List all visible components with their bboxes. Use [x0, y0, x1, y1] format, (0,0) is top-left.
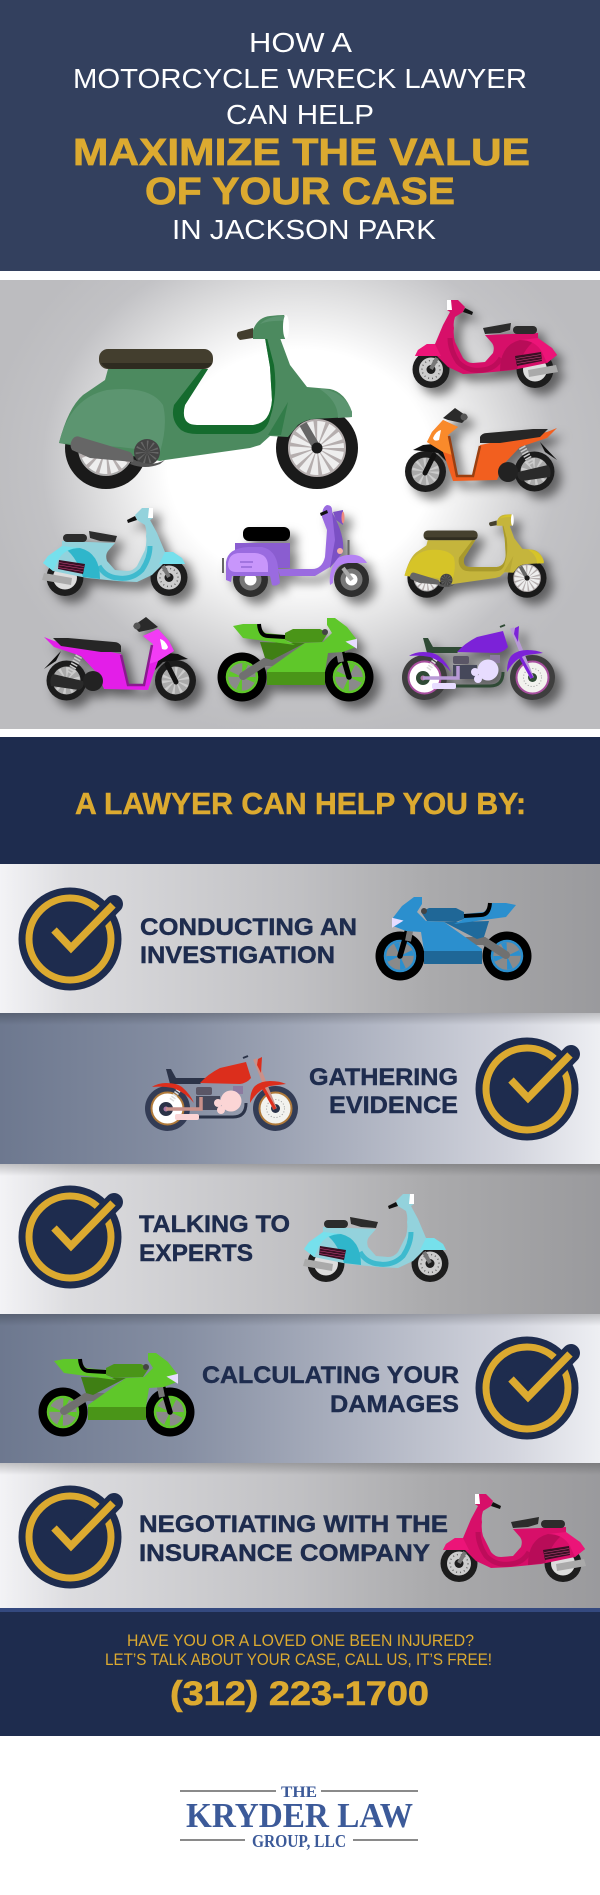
title: MOTORCYCLE WRECK LAWYER [73, 63, 527, 94]
icon: pink scooter [440, 1494, 586, 1582]
icon: violet cruiser [402, 625, 555, 700]
icon: check mark [18, 888, 122, 990]
title: OF YOUR CASE [145, 171, 455, 213]
panel: calculating your damages [0, 1314, 600, 1463]
text: talking to experts: TALKING TO [139, 1211, 290, 1238]
title [73, 27, 530, 245]
panel: lawyer help heading [0, 737, 600, 864]
text: talking to experts: EXPERTS [139, 1240, 253, 1267]
text: negotiating with the insurance company: NEGOTIATING WITH THE [139, 1511, 448, 1538]
text: conducting an investigation [140, 914, 357, 969]
text: gathering evidence [309, 1064, 458, 1119]
icon: check mark [476, 1038, 578, 1140]
icon: green sport bike [218, 618, 374, 702]
header panel [0, 0, 600, 271]
icon: check mark [18, 1186, 122, 1288]
icon: large green scooter [59, 315, 358, 489]
panel: conducting an investigation [0, 864, 600, 1013]
icon: orange scooter [405, 408, 557, 492]
icon: check mark [18, 1486, 122, 1588]
logo: The Kryder Law Group [180, 1784, 418, 1851]
title: MAXIMIZE THE VALUE [73, 132, 530, 174]
panel: talking to experts [0, 1164, 600, 1314]
panel: call to action [0, 1608, 600, 1736]
title: HOW A [249, 27, 352, 58]
text: calculating your damages [202, 1362, 459, 1418]
text: talking to experts [139, 1211, 290, 1267]
icon: check mark [476, 1336, 578, 1440]
logo: The Kryder Law Group: GROUP, LLC [252, 1831, 346, 1851]
icon: red cruiser [145, 1056, 298, 1131]
text: conducting an investigation: CONDUCTING AN [140, 914, 357, 941]
text: call prompt: HAVE YOU OR A LOVED ONE BEEN INJURED? [127, 1631, 474, 1650]
panel: gathering evidence [0, 1013, 600, 1164]
logo: The Kryder Law Group: THE [281, 1784, 317, 1801]
icon: purple scooter [222, 505, 369, 597]
panel: negotiating with the insurance company [0, 1463, 600, 1608]
logo: The Kryder Law Group: KRYDER LAW [186, 1796, 413, 1835]
text: call prompt [105, 1631, 492, 1669]
panel: motorcycle collection [0, 280, 600, 729]
text: calculating your damages: DAMAGES [330, 1391, 459, 1418]
title: IN JACKSON PARK [172, 214, 436, 245]
text: gathering evidence: EVIDENCE [329, 1092, 458, 1119]
phone number: (312) 223-1700 [170, 1675, 429, 1713]
text: negotiating with the insurance company [139, 1511, 448, 1567]
icon: green sport bike [38, 1353, 194, 1436]
text: calculating your damages: CALCULATING YOUR [202, 1362, 459, 1389]
icon: pink scooter [412, 300, 558, 388]
icon: magenta scooter [44, 617, 196, 701]
icon: yellow scooter [405, 514, 547, 598]
title: CAN HELP [226, 99, 374, 130]
icon: teal scooter [42, 508, 188, 596]
icon: blue sport bike [376, 897, 532, 980]
icon: teal scooter [303, 1194, 448, 1282]
text: call prompt: LET’S TALK ABOUT YOUR CASE, CALL US, IT’S FREE! [105, 1650, 492, 1669]
text: conducting an investigation: INVESTIGATION [140, 942, 335, 969]
text: negotiating with the insurance company: INSURANCE COMPANY [139, 1540, 430, 1567]
heading: A LAWYER CAN HELP YOU BY: [75, 786, 526, 821]
text: gathering evidence: GATHERING [309, 1064, 458, 1091]
